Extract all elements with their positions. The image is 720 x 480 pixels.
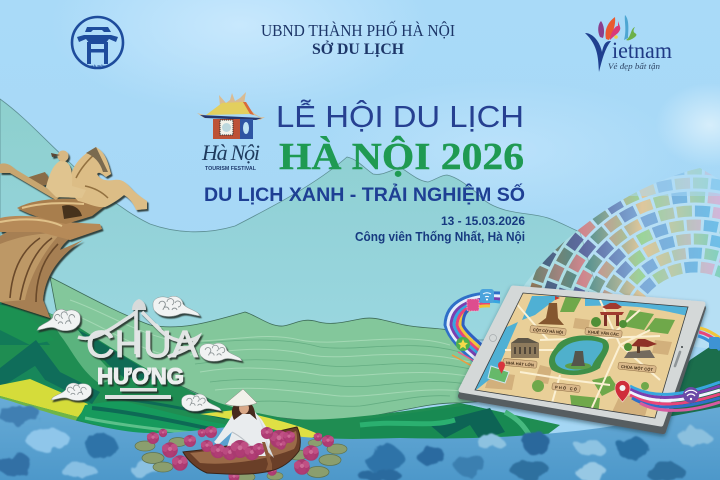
logo tagline: Vẻ đẹp bất tận [608,62,660,71]
ribbon stream behind tablet left [445,293,500,385]
label Khue Van Cac [585,327,622,338]
tablet [461,288,703,431]
title line 1: LỄ HỘI DU LỊCH [276,99,524,134]
icon: purple wifi badge [683,387,699,403]
decorative clouds [37,296,242,411]
logo bars [105,388,171,399]
festival roof [206,102,250,115]
label Chua Mot Cot: CHÙA MỘT CỘT [621,364,654,372]
festival eave [200,115,262,120]
rivers [522,296,560,320]
festival logo [197,92,265,172]
emblem gate [77,27,118,64]
icon: map tile with pin [488,362,509,383]
globe of coloured tiles [524,168,720,348]
teal mountain range [0,99,600,340]
label Chua Mot Cot [618,362,656,373]
event venue: Công viên Thống Nhất, Hà Nội [355,230,525,244]
festival pavilion [213,119,253,139]
water [0,398,720,480]
festival script name: Hà Nội [201,140,260,165]
organiser heading [261,21,455,58]
icon: pink gift cube [467,299,479,311]
title line 2: HÀ NỘI 2026 [279,135,524,178]
landmark Khue Van Cac [591,303,627,328]
icon: large red map pin [615,381,630,402]
landmark flag tower [538,296,564,325]
oar [262,442,272,470]
label Pho Co [552,383,580,393]
map labels [503,325,656,393]
label Pho Co: PHỐ CỔ [555,384,577,392]
tablet body [461,288,703,431]
logo pagoda finial and roof lines [78,299,198,357]
slogan: DU LỊCH XANH - TRẢI NGHIỆM SỐ [204,184,525,206]
festival side eaves [197,113,265,120]
sky light patches [50,0,720,220]
roads [505,300,660,412]
boat hull [183,427,300,474]
Hanoi city emblem [72,17,123,68]
event date: 13 - 15.03.2026 [441,216,525,228]
tablet speaker and sensor [675,346,683,366]
green textured hill [50,277,500,421]
icon: blue cube right [709,337,720,349]
tablet screen with map [476,294,688,418]
logo word Chua: CHÙA [86,323,199,366]
tablet screen border [475,293,688,418]
turtle tower [565,351,591,370]
label Cot Co: CỘT CỜ HÀ NỘI [533,327,563,335]
logo petals [598,15,636,40]
festival caption: TOURISM FESTIVAL [205,166,257,172]
festival rays [219,92,262,118]
conical hat [225,389,257,406]
woman in white ao dai [214,389,274,458]
label Nha Hat Lon [503,358,537,368]
ribbon stream right [630,328,720,410]
landmark opera house [511,338,539,358]
icon: green star badge [456,337,470,351]
logo word Huong: HƯƠNG [97,363,184,389]
emblem caption: HÀ NỘI [90,64,104,68]
Chua Huong logo [78,299,199,399]
terraced fields left [0,302,560,442]
lotus pile in boat [201,427,295,460]
organiser line 1: UBND THÀNH PHỐ HÀ NỘI [261,21,455,40]
label Cot Co [530,325,566,336]
boat with woman in ao dai [183,389,300,474]
label Nha Hat Lon: NHÀ HÁT LỚN [506,360,534,368]
lily pads and lotus flowers [135,426,347,480]
Hoan Kiem lake [549,336,609,375]
main title [204,99,525,244]
Vietnam tourism logo [585,15,672,72]
organiser line 2: SỞ DU LỊCH [312,39,405,58]
logo wordmark: ietnam [612,38,672,63]
tablet home button [490,334,496,342]
floating app icons [456,289,720,403]
logo V swoosh [585,33,611,72]
landmark One Pillar Pagoda [624,339,657,358]
icon: blue wifi cube [480,289,494,303]
city blocks [485,318,672,416]
green parks [532,296,675,415]
bronze horse rider statue [0,147,147,318]
right green patch behind tablet [660,340,720,418]
label Khue Van Cac: KHUÊ VĂN CÁC [588,329,619,337]
